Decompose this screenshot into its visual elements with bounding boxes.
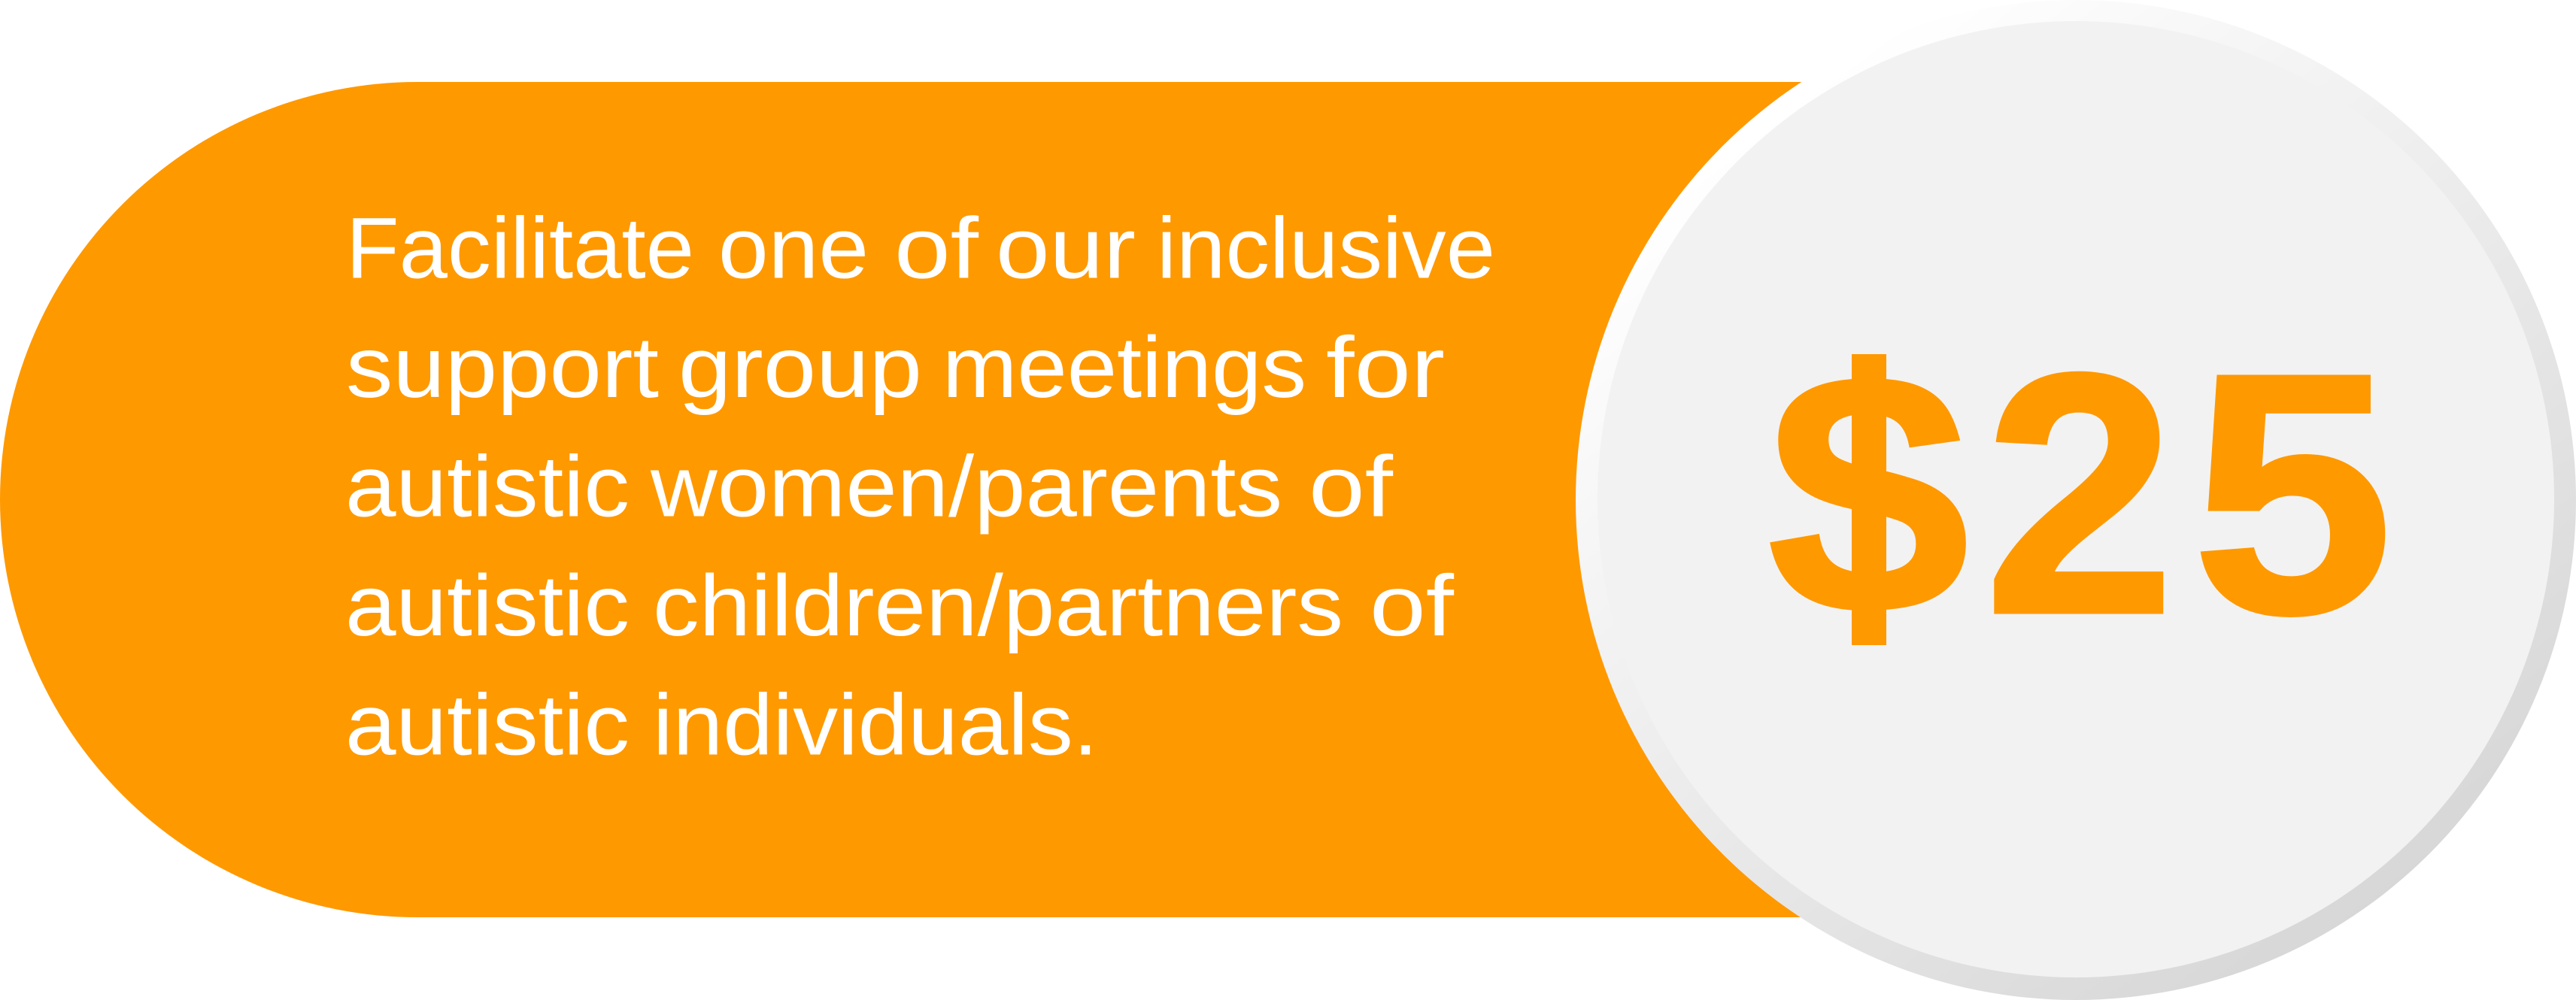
price: $25: $ <box>1767 303 1969 685</box>
text block: donation description: autistic <box>345 558 630 654</box>
price badge: outer ring <box>1576 0 2576 1000</box>
text block: donation description <box>345 200 1495 773</box>
text block: donation description: one <box>718 200 869 296</box>
panel: orange pill banner <box>0 82 2076 917</box>
text block: donation description: children/partners <box>653 558 1343 654</box>
text block: donation description: of <box>1370 558 1455 654</box>
text block: donation description: inclusive <box>1157 200 1495 296</box>
text block: donation description: meetings <box>942 320 1306 416</box>
text block: donation description: autistic <box>345 439 630 535</box>
text block: donation description: women/parents <box>650 439 1282 535</box>
text block: donation description: group <box>678 320 922 416</box>
text block: donation description: autistic <box>345 677 630 773</box>
text block: donation description: our <box>996 200 1136 296</box>
price: $25: 5 <box>2192 303 2393 685</box>
text block: donation description: of <box>1309 439 1394 535</box>
price: $25 <box>1767 303 2393 685</box>
text block: donation description: of <box>894 200 979 296</box>
text block: donation description: support <box>346 320 659 416</box>
text block: donation description: for <box>1326 320 1445 416</box>
price badge: inner disc <box>1597 21 2554 977</box>
text block: donation description: individuals. <box>653 677 1098 773</box>
price: $25: 2 <box>1984 303 2175 685</box>
text block: donation description: Facilitate <box>346 200 694 296</box>
